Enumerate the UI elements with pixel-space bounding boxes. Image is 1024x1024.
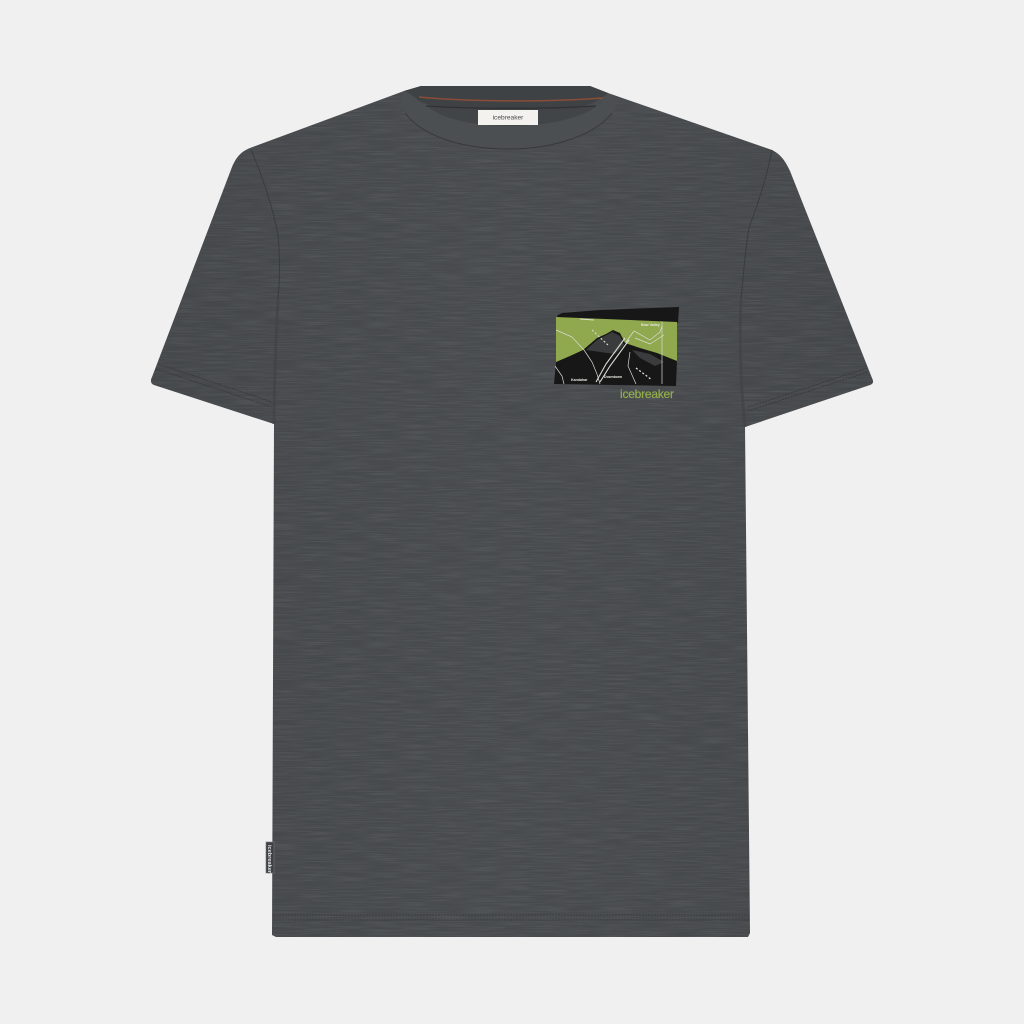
back neck inside shadow [426,105,596,126]
neck label: icebreaker [493,114,524,122]
map place labels: Bow Valley [641,323,660,327]
red neck tape stripe [419,97,603,101]
green icebreaker logo: icebreaker [620,387,674,401]
garment silhouette [151,86,873,937]
sleeve seams [251,150,772,300]
collar seam [405,113,612,149]
t-shirt [151,86,873,937]
map place labels: Kandahar [571,378,588,382]
black torn top band [556,307,679,323]
hem stitching [156,364,868,920]
collar rib [402,91,615,149]
black mountain silhouette [554,330,677,386]
grey mountain shading [586,332,664,366]
neck label [478,110,538,125]
neck inner [404,86,608,117]
chest print: mountain map [554,307,679,401]
neck tape lower edge [426,106,596,108]
underarm shading [274,300,745,427]
side hem tag [266,842,274,874]
white map route lines [555,317,664,384]
map place labels [571,323,660,382]
fabric heather texture [151,86,873,937]
green sky panel [556,317,677,364]
side hem tag: icebreaker [266,845,272,874]
map place labels: Downtown [604,375,622,379]
